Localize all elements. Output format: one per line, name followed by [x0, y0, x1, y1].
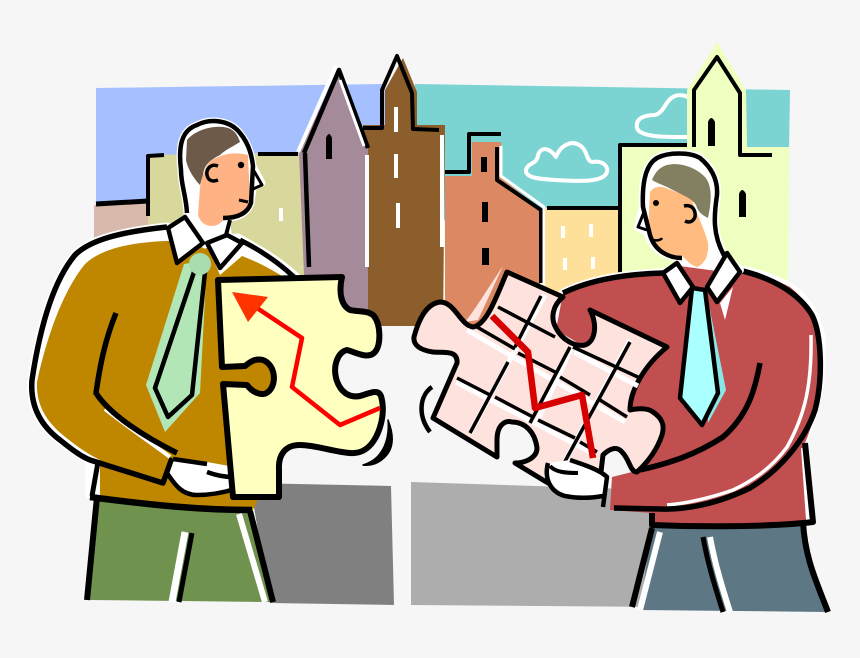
puzzle piece: left yellow with rising arrow — [218, 277, 383, 497]
tie: cyan — [680, 288, 726, 425]
chart line: red arrow — [232, 292, 380, 425]
icon: clouds — [526, 95, 689, 181]
building: left pink and olive blocks — [94, 153, 310, 300]
trousers: green — [87, 495, 273, 602]
motion swoosh: right — [422, 387, 432, 432]
collar: left man — [168, 217, 242, 268]
grid lines — [456, 295, 640, 465]
panel: sky backdrop — [96, 84, 790, 220]
trousers: slate — [632, 522, 828, 612]
ground: grey paving slabs — [250, 482, 660, 607]
chart line: red falling — [492, 316, 593, 458]
building: yellow block — [545, 208, 620, 298]
head: left man — [180, 121, 262, 245]
motion swoosh: left — [363, 420, 392, 465]
figure: right man — [556, 154, 828, 612]
head: right man — [638, 154, 740, 270]
puzzle piece: right pink with falling chart — [414, 266, 667, 490]
hand: left man — [167, 458, 235, 495]
hand: right man — [547, 460, 607, 507]
sweater: red — [556, 255, 821, 527]
halo: left man shoulders — [32, 227, 296, 495]
building: purple church — [298, 66, 369, 320]
tie: green — [146, 253, 211, 432]
building: brown tower — [363, 56, 445, 326]
building: pale green church — [618, 42, 789, 300]
collar: right man — [663, 253, 740, 303]
building: terracotta house — [445, 134, 544, 330]
halo: right man shoulders — [563, 255, 822, 505]
sweater: ochre — [32, 227, 294, 510]
figure: left man — [32, 121, 296, 602]
